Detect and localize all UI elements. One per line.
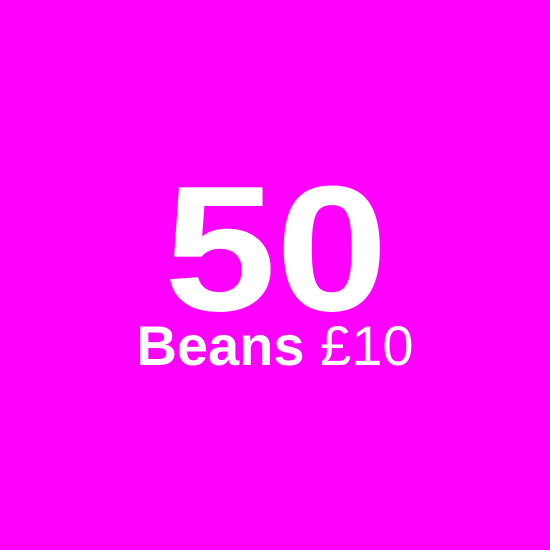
- headline number: 50: [164, 149, 388, 348]
- subtitle: beans price: Beans £10: [136, 314, 414, 376]
